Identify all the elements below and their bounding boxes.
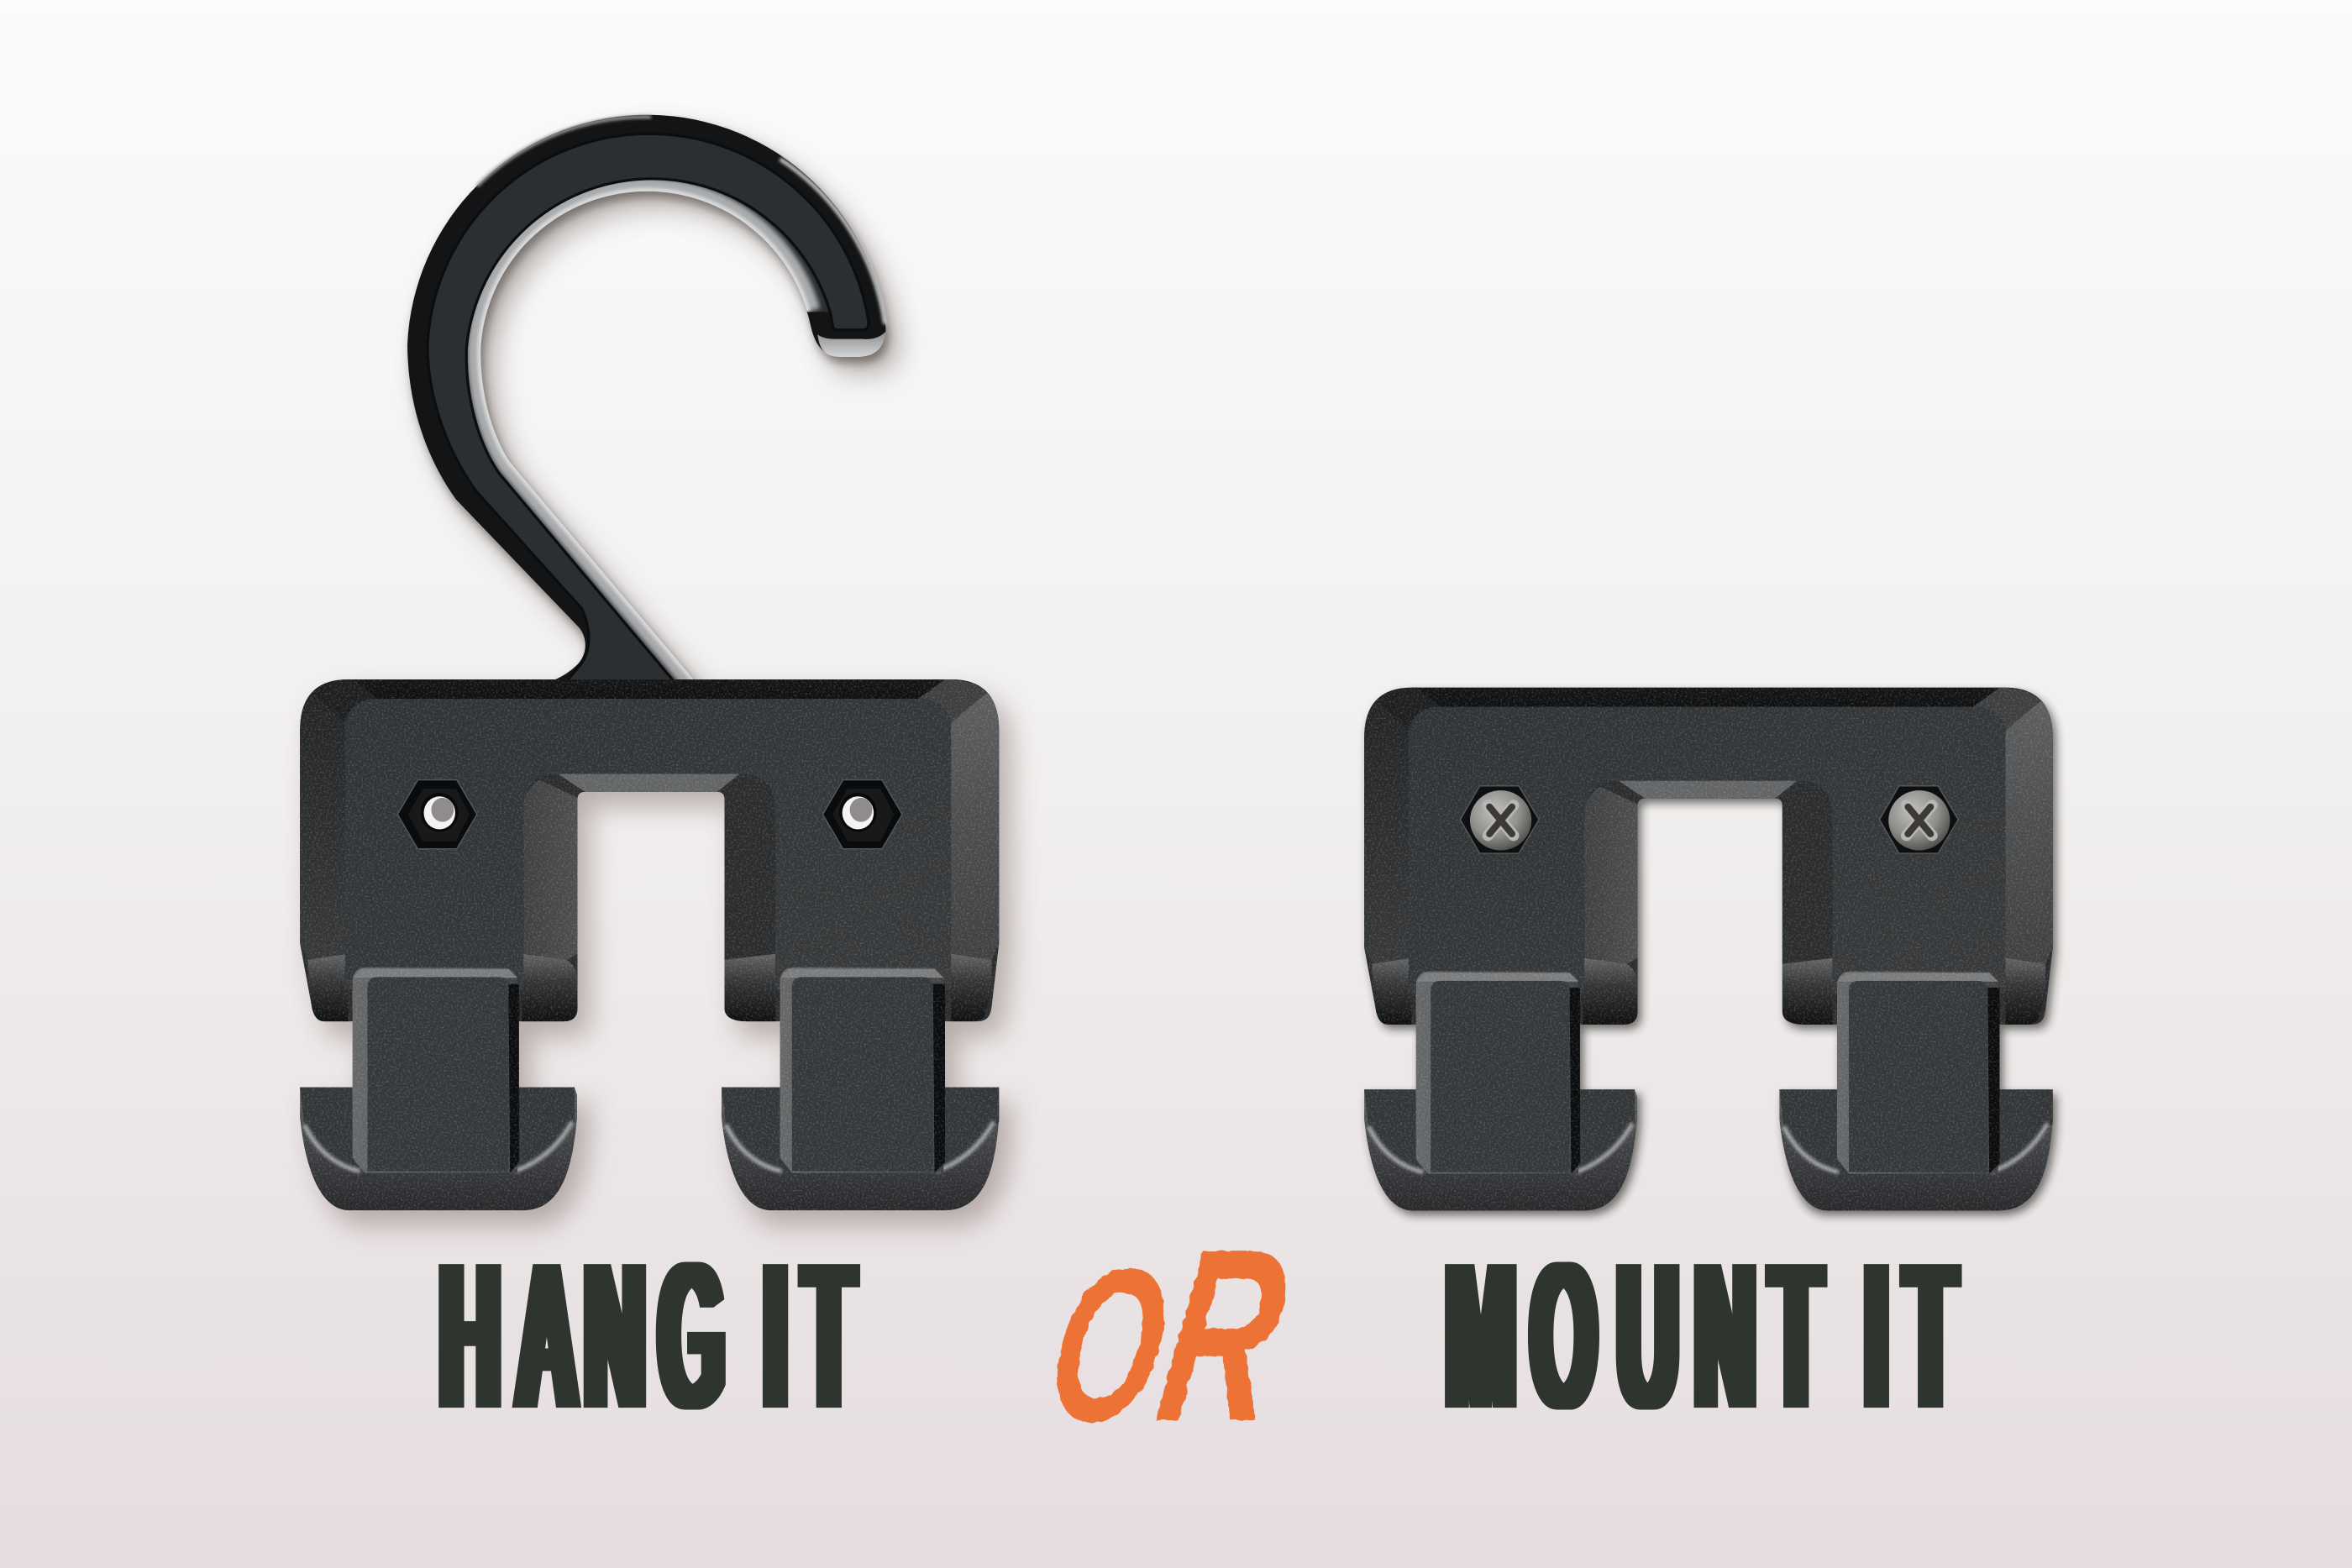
script word: or: OR bbox=[1034, 1197, 1302, 1473]
hook tip bbox=[817, 332, 885, 357]
left hex recess with hole bbox=[397, 780, 477, 849]
hook channel bbox=[428, 134, 869, 681]
left bracket shadow bbox=[312, 695, 1011, 1225]
hook soft shadow bbox=[421, 131, 900, 697]
left screw bbox=[1460, 786, 1539, 853]
left bracket: hang it bbox=[300, 679, 1011, 1225]
heading: hang it: HANG IT bbox=[440, 1220, 854, 1453]
hook tight shadow bbox=[411, 121, 889, 687]
heading: mount it: MOUNT IT bbox=[1446, 1220, 1956, 1453]
hook body bbox=[407, 115, 885, 681]
right bracket body bbox=[1364, 688, 2053, 1210]
left bracket body bbox=[300, 679, 999, 1210]
hook inner metallic edge bbox=[467, 180, 828, 679]
right bracket: mount it bbox=[1364, 688, 2056, 1215]
right screw bbox=[1880, 786, 1958, 853]
hook bbox=[405, 105, 900, 697]
hook outer rim highlights bbox=[780, 159, 885, 324]
right hex recess with hole bbox=[822, 780, 902, 849]
right bracket shadow bbox=[1368, 692, 2056, 1215]
